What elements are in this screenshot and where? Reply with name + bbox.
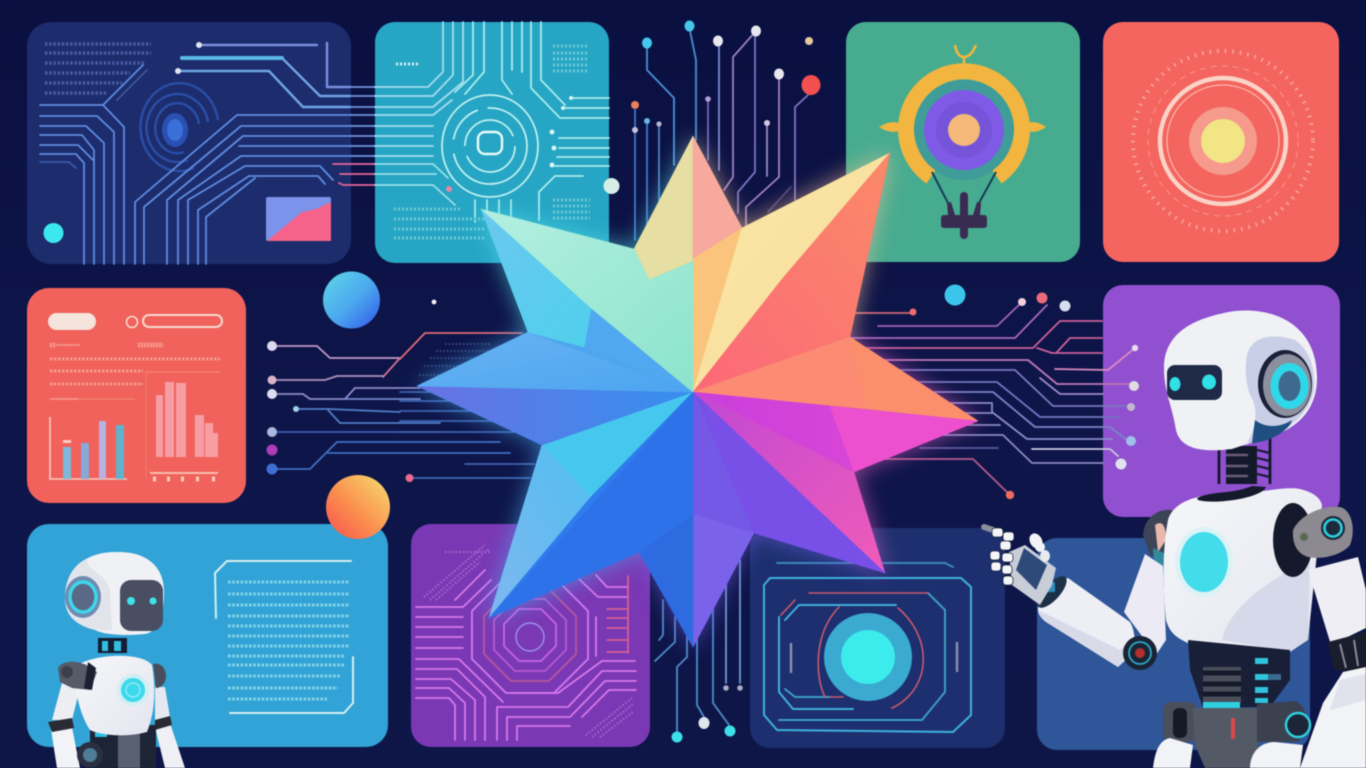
node: pale sphere [604, 178, 620, 194]
dot field [419, 344, 496, 375]
micro text blocks [394, 46, 590, 238]
vertical traces [455, 22, 609, 222]
robot neck [1219, 438, 1270, 484]
pink traces [333, 164, 375, 185]
trace nodes [446, 96, 573, 192]
traces: right [850, 284, 1139, 499]
bar chart left [50, 417, 127, 479]
large robot [984, 310, 1366, 768]
top traces [178, 43, 350, 107]
panel: purple circuit [411, 524, 650, 747]
robot right arm [1300, 557, 1366, 768]
robot head [65, 552, 164, 635]
panel: circuit navy [27, 22, 351, 264]
panel: navy lens [750, 528, 1005, 748]
robot pelvis [1163, 701, 1310, 768]
facets: bottom [489, 392, 754, 647]
trace nodes [672, 685, 743, 742]
text brackets [215, 561, 353, 713]
facets: top [634, 136, 742, 392]
facets: lower left [417, 386, 693, 618]
robot chest light [117, 674, 149, 706]
robot shoulder joints [58, 662, 166, 690]
status dot [44, 223, 64, 243]
robot right shoulder joint [1273, 503, 1353, 577]
frame traces [764, 563, 971, 732]
text rows [228, 582, 350, 699]
dot fields [424, 545, 633, 737]
lower right traces [135, 115, 351, 264]
text rows [50, 345, 220, 399]
panel: circuit teal [333, 22, 609, 263]
circuit rings [442, 95, 538, 197]
robot left shoulder back [1143, 510, 1172, 575]
traces: left [266, 300, 534, 482]
panel: blue right [1037, 538, 1310, 750]
trace nodes [910, 284, 1139, 499]
red accents [781, 593, 928, 708]
radar rings [141, 83, 218, 171]
sphere: blue [323, 272, 380, 328]
robot torso [1164, 486, 1322, 652]
robot abdomen [1188, 640, 1290, 709]
gauge bars [791, 642, 957, 673]
connecting traces across gap [351, 87, 375, 156]
coral ladder [607, 576, 628, 653]
panel: coral target [1103, 22, 1339, 262]
small robot [48, 552, 185, 768]
star glow [417, 136, 978, 647]
bar chart right [146, 372, 218, 479]
facets: lower right [693, 392, 978, 573]
robot wrist [1123, 636, 1157, 670]
icon: concentric target [1133, 51, 1313, 231]
panel: coral dashboard [27, 288, 246, 503]
central star [417, 136, 978, 647]
robot hand [984, 527, 1056, 605]
header controls [48, 313, 222, 330]
traces: bottom center [655, 560, 743, 742]
trace nodes [631, 20, 820, 133]
chest light [1180, 532, 1228, 592]
robot neck [98, 638, 127, 653]
micro text block [45, 44, 151, 93]
circuit traces [416, 570, 636, 740]
icon: balloon [879, 45, 1046, 239]
panel: purple right [1103, 285, 1340, 517]
mini card [266, 197, 331, 241]
octagon rings [472, 577, 588, 693]
traces into core [375, 22, 463, 156]
sphere: orange [326, 475, 390, 539]
robot arms [48, 683, 185, 768]
facets: upper left [417, 209, 693, 392]
robot forearm [1033, 572, 1134, 667]
traces: top center [631, 20, 820, 240]
panel: green balloon [846, 22, 1080, 262]
robot waist [77, 725, 156, 768]
facets: upper right [693, 153, 978, 421]
robot head [1164, 310, 1317, 450]
trace nodes [266, 300, 436, 482]
panel: blue text panel [27, 524, 388, 747]
robot upper arm left [1124, 554, 1166, 655]
lens [824, 613, 912, 701]
robot torso [75, 656, 154, 735]
left traces [40, 65, 147, 264]
robot legs [1153, 738, 1303, 768]
